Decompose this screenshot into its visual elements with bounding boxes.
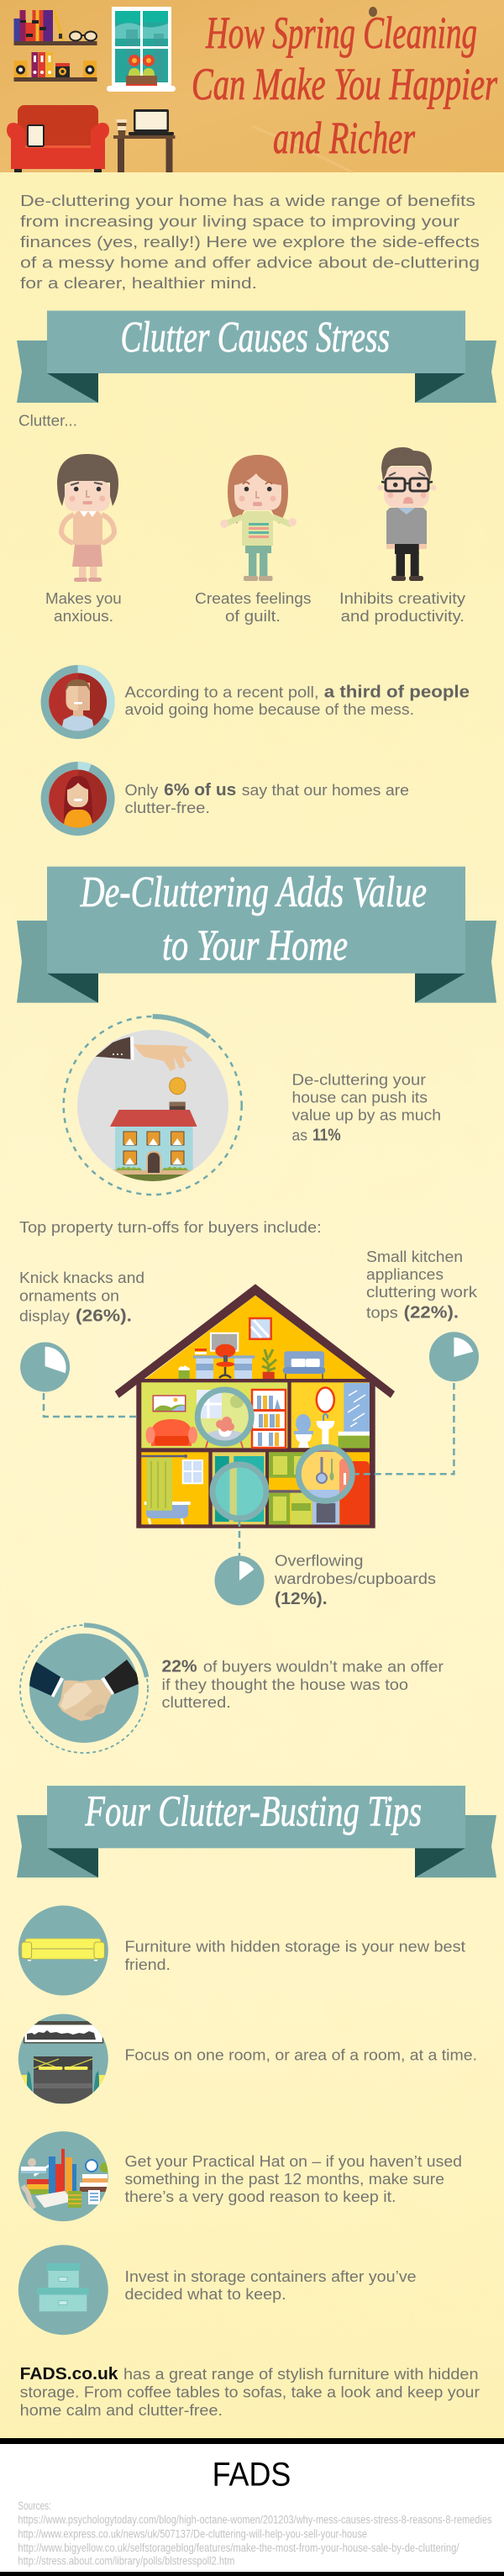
- tip 3 text: there’s a very good reason to keep it.: [124, 2188, 396, 2205]
- icon: side table with laptop and coffee: [113, 109, 175, 172]
- intro text: finances (yes, really!) Here we explore the side-effects: [20, 234, 480, 251]
- tip 4 text: Invest in storage containers after you’ve: [124, 2268, 417, 2285]
- stat: six percent: Only: [124, 782, 158, 799]
- text: eleven percent value: De-cluttering your: [292, 1072, 426, 1089]
- text: overflowing wardrobes: [274, 1553, 436, 1608]
- icon: yellow storage sofa: [18, 1905, 108, 1996]
- text: small kitchen appliances: cluttering work: [366, 1284, 478, 1301]
- closing text: FADS.co.uk: home calm and clutter-free.: [20, 2402, 223, 2419]
- stat: 22 percent wouldn't make an offer: of buyers wouldn’t make an offer: [203, 1658, 444, 1675]
- text: eleven percent value: value up by as much: [292, 1107, 441, 1124]
- banner: De-Cluttering Adds Value to Your Home: [17, 867, 496, 1003]
- tip 4 text: decided what to keep.: [124, 2286, 286, 2303]
- caption: creates feelings of guilt: of guilt.: [225, 608, 281, 625]
- connector: bottom dashed line: [239, 1520, 240, 1556]
- tip 3 text: [124, 2153, 462, 2205]
- figure: worried man with glasses: [378, 447, 437, 581]
- stat: six percent: clutter-free.: [124, 800, 210, 816]
- tip 1 text: friend.: [124, 1956, 171, 1973]
- caption: creates feelings of guilt: Creates feelings: [195, 590, 311, 607]
- stat: a third of people: According to a recent poll,: [124, 684, 319, 700]
- stat: a third of people: a third of people: [324, 683, 470, 701]
- icon: storage boxes: [18, 2245, 108, 2335]
- footer panel: [0, 2438, 504, 2576]
- stat: six percent: [124, 781, 409, 816]
- caption: makes you anxious: [45, 590, 122, 625]
- stat: 22 percent wouldn't make an offer: 22%: [161, 1657, 197, 1676]
- caption: creates feelings of guilt: [195, 590, 311, 625]
- banner: Clutter Causes Stress: Clutter Causes Stress: [121, 314, 390, 362]
- caption: inhibits creativity and productivity: and productivity.: [341, 608, 465, 625]
- header band: [0, 0, 504, 172]
- tip 3 text: something in the past 12 months, make sure: [124, 2171, 444, 2188]
- bathtub room: [141, 1454, 202, 1524]
- text: overflowing wardrobes: Overflowing: [275, 1553, 363, 1570]
- figure: anxious woman: [57, 454, 118, 582]
- icon: handshake ring: [20, 1625, 148, 1753]
- text: overflowing wardrobes: (12%).: [275, 1590, 328, 1608]
- intro text: [20, 193, 480, 292]
- caption: makes you anxious: Makes you: [45, 590, 122, 607]
- pie: 12 percent: [215, 1555, 264, 1606]
- text: knick knacks: display: [19, 1308, 70, 1325]
- bathroom: [294, 1383, 370, 1448]
- text: small kitchen appliances: [366, 1248, 478, 1322]
- stat: six percent: 6% of us: [164, 781, 236, 800]
- illustration: cutaway house: [115, 1284, 395, 1528]
- tip 2 text: Focus on one room, or area of a room, at a time.: [124, 2047, 477, 2064]
- text: knick knacks: Knick knacks and: [19, 1270, 144, 1286]
- text: eleven percent value: [292, 1072, 441, 1145]
- icon: six percent ring with woman: [45, 766, 111, 831]
- text: overflowing wardrobes: wardrobes/cupboards: [274, 1570, 436, 1587]
- intro text: of a messy home and offer advice about de-cluttering: [20, 255, 480, 272]
- figure: guilty woman: [220, 455, 297, 581]
- stat: a third of people: avoid going home because of the mess.: [124, 701, 414, 718]
- caption: inhibits creativity and productivity: [339, 590, 465, 625]
- stat: 22 percent wouldn't make an offer: [161, 1657, 444, 1711]
- tip 1 text: [124, 1939, 465, 1973]
- text: small kitchen appliances: (22%).: [404, 1304, 459, 1322]
- connector: right dashed line: [355, 1383, 454, 1474]
- text: small kitchen appliances: Small kitchen: [366, 1248, 463, 1265]
- text: small kitchen appliances: appliances: [366, 1266, 444, 1283]
- heading: top property turn-offs: Top property turn-offs for buyers include:: [19, 1219, 322, 1236]
- text: eleven percent value: 11%: [312, 1127, 341, 1145]
- caption: makes you anxious: anxious.: [54, 608, 113, 625]
- kitchen with magnifier: [269, 1446, 370, 1524]
- label: Clutter...: Clutter...: [18, 413, 77, 430]
- title: [192, 8, 498, 163]
- icon: red armchair with tablet: [7, 105, 109, 172]
- tip 3 text: Get your Practical Hat on – if you haven’t used: [124, 2153, 462, 2170]
- intro text: De-cluttering your home has a wide range of benefits: [20, 193, 475, 209]
- text: knick knacks: ornaments on: [19, 1288, 119, 1305]
- stat: 22 percent wouldn't make an offer: if they thought the house was too: [161, 1676, 408, 1693]
- banner: Four Clutter-Busting Tips: [17, 1786, 496, 1877]
- closing text: FADS.co.uk: [20, 2365, 480, 2419]
- text: knick knacks: [19, 1270, 144, 1326]
- text: small kitchen appliances: tops: [366, 1305, 398, 1322]
- icon: shelf with speakers, binders and camera: [13, 52, 97, 82]
- icon: bedroom with skyline picture: [18, 2014, 108, 2104]
- closing text: FADS.co.uk: has a great range of stylish furniture with hidden: [123, 2366, 479, 2383]
- wardrobe with magnifier: [213, 1456, 266, 1522]
- stat: 22 percent wouldn't make an offer: cluttered.: [161, 1694, 231, 1711]
- icon: a third ring with man: [45, 669, 111, 735]
- icon: bookshelf with books and glasses: [13, 10, 97, 45]
- sources: http://www.express.co.uk/news/uk/507137/De-cluttering-will-help-you-sell-your-house: [18, 2527, 367, 2540]
- text: eleven percent value: house can push its: [292, 1090, 428, 1106]
- pie: 26 percent: [20, 1342, 70, 1392]
- banner: Clutter Causes Stress: [17, 311, 496, 403]
- stat: a third of people: [124, 683, 470, 718]
- icon: coin dropping onto house, eleven percent ring: [64, 1016, 242, 1195]
- tip 1 text: Furniture with hidden storage is your new best: [124, 1939, 465, 1956]
- icon: window with flowers: [107, 7, 176, 92]
- stat: six percent: say that our homes are: [242, 782, 409, 799]
- sources: [18, 2499, 492, 2568]
- closing text: FADS.co.uk: FADS.co.uk: [20, 2365, 118, 2383]
- closing text: FADS.co.uk: storage. From coffee tables to sofas, take a look and keep your: [20, 2384, 480, 2401]
- icon: messy books and papers: [18, 2131, 110, 2221]
- text: knick knacks: (26%).: [76, 1307, 132, 1326]
- attic room furniture: [179, 1318, 325, 1379]
- intro text: for a clearer, healthier mind.: [20, 275, 257, 292]
- intro text: from increasing your living space to improving your: [20, 214, 459, 230]
- pie: 22 percent: [429, 1332, 479, 1381]
- banner: De-Cluttering Adds Value to Your Home: to Your Home: [162, 922, 348, 970]
- living room: [146, 1387, 286, 1448]
- sources: Sources:: [18, 2499, 51, 2512]
- caption: inhibits creativity and productivity: Inhibits creativity: [339, 590, 465, 607]
- tip 4 text: [124, 2268, 417, 2303]
- FADS logo: FADS: [213, 2457, 291, 2494]
- sources: http://stress.about.com/library/polls/blstresspoll2.htm: [18, 2555, 234, 2568]
- connector: left dashed line: [44, 1393, 195, 1417]
- text: eleven percent value: as: [292, 1127, 307, 1144]
- title: and Richer: [273, 113, 416, 163]
